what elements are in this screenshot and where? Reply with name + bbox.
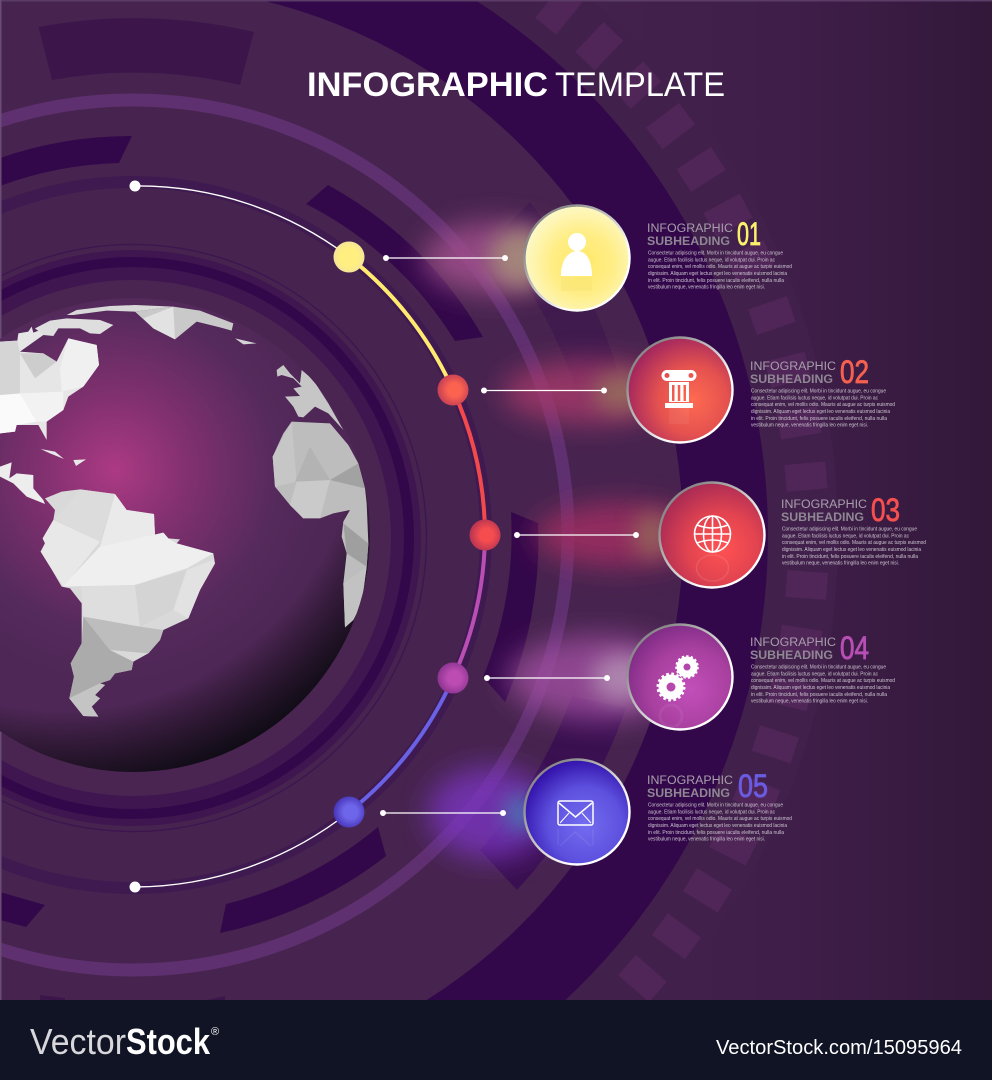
icon: globe bbox=[694, 516, 730, 581]
title bbox=[307, 66, 725, 104]
timeline arc with nodes bbox=[130, 180, 500, 892]
north america bbox=[0, 305, 257, 504]
icon: person bbox=[561, 233, 592, 291]
text block 02: consequat enim, vel mollis odio. Mauris at augue ac turpis euismod bbox=[751, 402, 895, 408]
text block 05: in elit. Proin tincidunt, felis posuere iaculis eleifend, nulla nulla bbox=[648, 830, 784, 836]
title: TEMPLATE bbox=[555, 66, 725, 104]
text block 03: 03 bbox=[871, 492, 900, 528]
south america bbox=[41, 489, 215, 717]
circle 3 with globe icon bbox=[660, 482, 764, 588]
text block 04: in elit. Proin tincidunt, felis posuere iaculis eleifend, nulla nulla bbox=[751, 692, 887, 698]
text block 03: augue. Etiam facilisis luctus neque, id volutpat dui. Proin ac bbox=[782, 533, 909, 539]
outer tick squares bbox=[535, 0, 828, 1002]
text block 05: 05 bbox=[738, 768, 768, 804]
text block 03: consequat enim, vel mollis odio. Mauris at augue ac turpis euismod bbox=[782, 540, 926, 546]
text block 01: augue. Etiam facilisis luctus neque, id volutpat dui. Proin ac bbox=[648, 257, 775, 263]
text block 01: SUBHEADING bbox=[647, 234, 730, 248]
text block 05: SUBHEADING bbox=[647, 786, 730, 800]
text block 03: Consectetur adipiscing elit. Morbi in tincidunt augue, eu congue bbox=[782, 526, 917, 532]
text block 02 bbox=[750, 354, 895, 429]
text block 01: INFOGRAPHIC bbox=[647, 221, 733, 235]
footer logo: Vector bbox=[30, 1021, 126, 1062]
text block 05: vestibulum neque, venenatis fringilla leo enim eget nisi. bbox=[648, 837, 765, 843]
text block 01 bbox=[647, 216, 792, 291]
text block 04: dignissim. Aliquam eget lectus eget leo venenatis euismod lacinia bbox=[751, 685, 890, 691]
text block 02: vestibulum neque, venenatis fringilla leo enim eget nisi. bbox=[751, 423, 868, 429]
text block 02: SUBHEADING bbox=[750, 372, 833, 386]
text block 05: augue. Etiam facilisis luctus neque, id volutpat dui. Proin ac bbox=[648, 809, 775, 815]
text block 01: in elit. Proin tincidunt, felis posuere iaculis eleifend, nulla nulla bbox=[648, 278, 784, 284]
text block 05: Consectetur adipiscing elit. Morbi in tincidunt augue, eu congue bbox=[648, 802, 783, 808]
text block 01: vestibulum neque, venenatis fringilla leo enim eget nisi. bbox=[648, 285, 765, 291]
text block 03: vestibulum neque, venenatis fringilla leo enim eget nisi. bbox=[782, 561, 899, 567]
text block 01: consequat enim, vel mollis odio. Mauris at augue ac turpis euismod bbox=[648, 264, 792, 270]
circle 4 with gears icon bbox=[628, 624, 732, 730]
text block 05: dignissim. Aliquam eget lectus eget leo venenatis euismod lacinia bbox=[648, 823, 787, 829]
text block 04: SUBHEADING bbox=[750, 648, 833, 662]
text block 02: 02 bbox=[840, 354, 869, 390]
footer logo: Stock bbox=[126, 1021, 211, 1062]
footer logo: ® bbox=[211, 1026, 219, 1038]
text block 05: INFOGRAPHIC bbox=[647, 773, 733, 787]
text block 05: consequat enim, vel mollis odio. Mauris at augue ac turpis euismod bbox=[648, 816, 792, 822]
text block 04: Consectetur adipiscing elit. Morbi in tincidunt augue, eu congue bbox=[751, 664, 886, 670]
title: INFOGRAPHIC bbox=[307, 66, 548, 104]
text block 04: INFOGRAPHIC bbox=[750, 635, 836, 649]
circle 5 with envelope icon bbox=[524, 760, 630, 864]
glow streaks behind circles bbox=[423, 222, 705, 859]
globe with low-poly continents bbox=[0, 298, 370, 772]
text block 03: dignissim. Aliquam eget lectus eget leo venenatis euismod lacinia bbox=[782, 547, 921, 553]
text block 01: dignissim. Aliquam eget lectus eget leo venenatis euismod lacinia bbox=[648, 271, 787, 277]
text block 04: augue. Etiam facilisis luctus neque, id volutpat dui. Proin ac bbox=[751, 671, 878, 677]
text block 02: dignissim. Aliquam eget lectus eget leo venenatis euismod lacinia bbox=[751, 409, 890, 415]
text block 03: in elit. Proin tincidunt, felis posuere iaculis eleifend, nulla nulla bbox=[782, 554, 918, 560]
connector lines bbox=[380, 255, 639, 816]
text block 02: INFOGRAPHIC bbox=[750, 359, 836, 373]
footer image id: VectorStock.com/15095964 bbox=[716, 1037, 962, 1059]
text block 02: in elit. Proin tincidunt, felis posuere iaculis eleifend, nulla nulla bbox=[751, 416, 887, 422]
text block 03 bbox=[781, 492, 926, 567]
text block 04: vestibulum neque, venenatis fringilla leo enim eget nisi. bbox=[751, 699, 868, 705]
text block 05 bbox=[647, 768, 792, 843]
text block 01: Consectetur adipiscing elit. Morbi in tincidunt augue, eu congue bbox=[648, 250, 783, 256]
icon: gears bbox=[658, 656, 698, 727]
circle 2 with column icon bbox=[628, 338, 732, 442]
text block 04: 04 bbox=[840, 630, 869, 666]
text block 03: SUBHEADING bbox=[781, 510, 864, 524]
text block 04: consequat enim, vel mollis odio. Mauris at augue ac turpis euismod bbox=[751, 678, 895, 684]
text block 03: INFOGRAPHIC bbox=[781, 497, 867, 511]
text block 02: augue. Etiam facilisis luctus neque, id volutpat dui. Proin ac bbox=[751, 395, 878, 401]
text block 02: Consectetur adipiscing elit. Morbi in tincidunt augue, eu congue bbox=[751, 388, 886, 394]
text block 04 bbox=[750, 630, 895, 705]
text block 01: 01 bbox=[737, 216, 761, 252]
circle 1 with person icon bbox=[524, 206, 630, 310]
africa and europe bbox=[273, 365, 368, 627]
icon: envelope bbox=[558, 801, 593, 846]
footer logo bbox=[30, 1021, 219, 1062]
footer bar bbox=[0, 1000, 992, 1080]
icon: column bbox=[662, 370, 696, 424]
